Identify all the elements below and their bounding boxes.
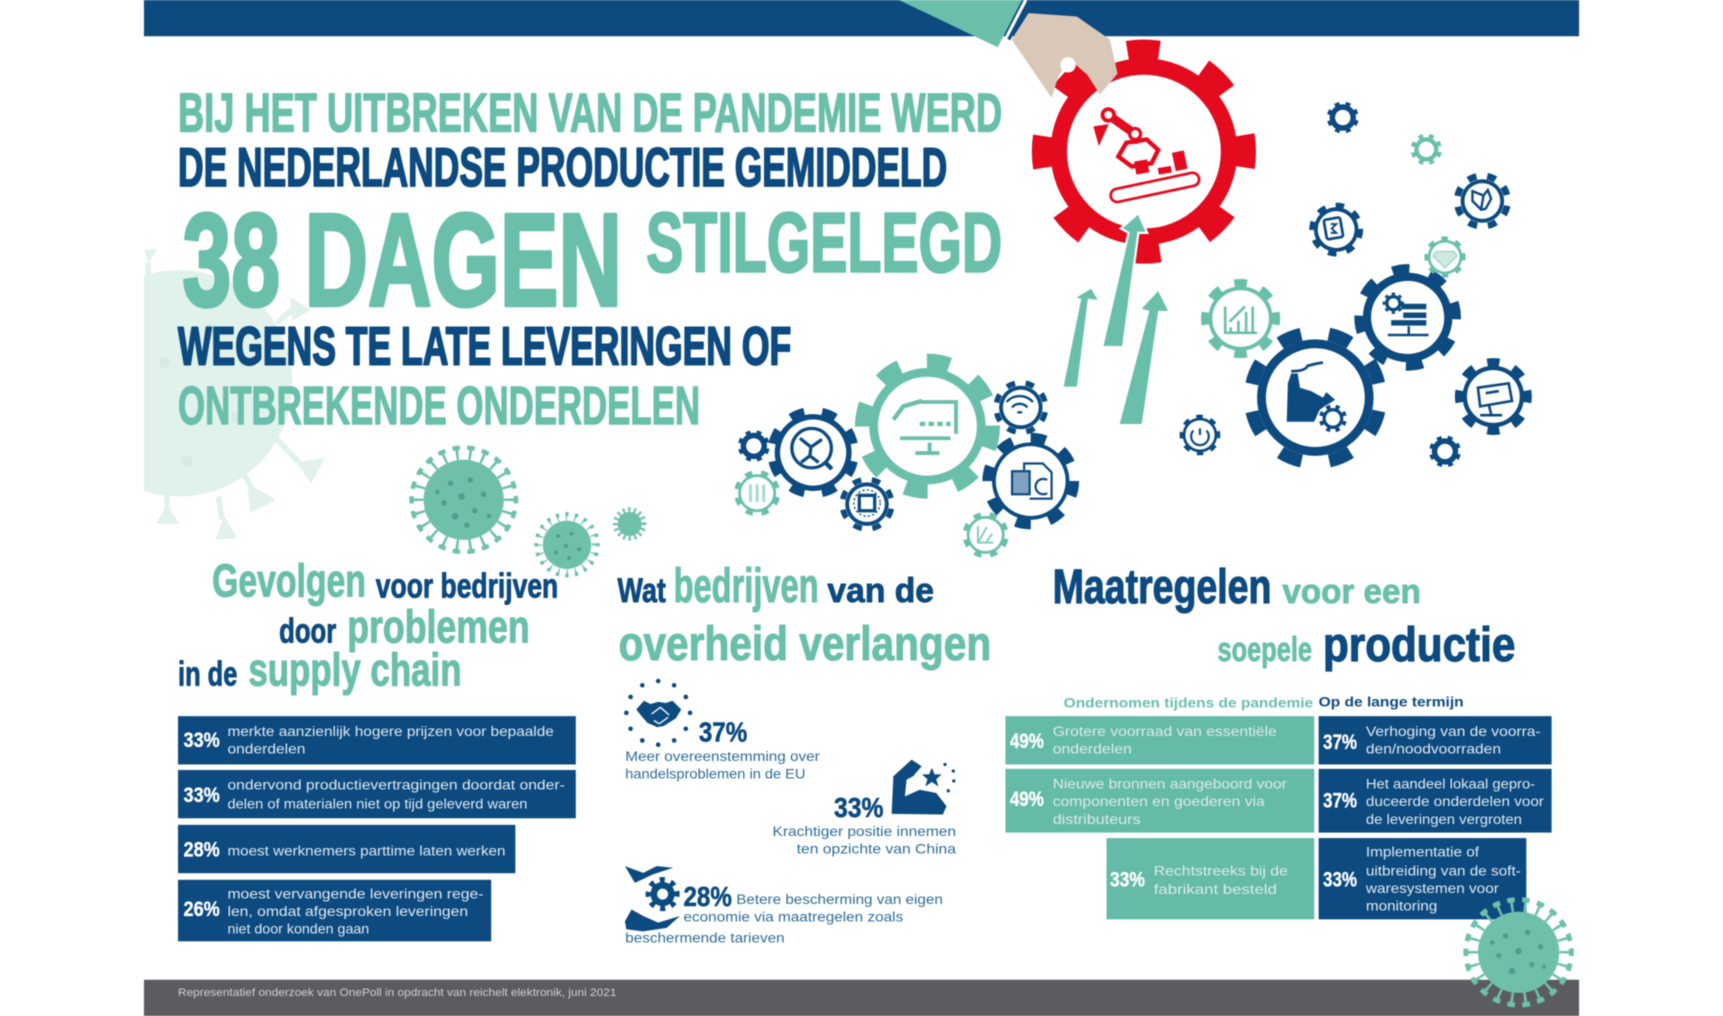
bar: 26% vervangende leveringen: 26% bbox=[184, 898, 220, 921]
heading: gevolgen: voor bedrijven bbox=[376, 568, 558, 606]
box: 49% voorraad bbox=[1005, 716, 1314, 764]
stat: 37%: Meer overeenstemming over bbox=[625, 749, 820, 765]
icon: chart bbox=[1225, 306, 1257, 333]
box: 33% rechtstreeks: 33% bbox=[1110, 868, 1145, 891]
heading: overheid: van de bbox=[827, 572, 934, 610]
virus: medium bbox=[536, 514, 598, 576]
bar: 33% hogere prijzen: 33% bbox=[184, 729, 220, 752]
box: 33% software: 33% bbox=[1323, 868, 1357, 891]
stat: 28%: Betere bescherming van eigen bbox=[736, 892, 943, 908]
column label: lange termijn: Op de lange termijn bbox=[1319, 694, 1464, 709]
box: 49% nieuwe bronnen bbox=[1005, 769, 1314, 833]
icon: handshake with stars bbox=[626, 681, 690, 745]
box: 33% rechtstreeks: fabrikant besteld bbox=[1154, 882, 1277, 898]
heading: overheid: Wat bbox=[618, 572, 666, 610]
main headline bbox=[178, 81, 1002, 436]
box: 49% nieuwe bronnen: componenten en goederen via bbox=[1053, 794, 1265, 810]
icon: bars bbox=[751, 484, 764, 502]
icon: conveyor belt bbox=[1109, 172, 1200, 203]
box: 49% nieuwe bronnen: 49% bbox=[1010, 788, 1044, 811]
icon: chip bbox=[854, 490, 880, 516]
main headline: STILGELEGD bbox=[646, 194, 1002, 289]
bar: 26% vervangende leveringen: moest vervangende leveringen rege- bbox=[227, 886, 484, 902]
stat: 28% bbox=[625, 881, 943, 946]
box: 49% voorraad: Grotere voorraad van essentiële bbox=[1053, 724, 1277, 740]
box: 49% voorraad: onderdelen bbox=[1053, 741, 1132, 757]
stat: 33%: ten opzichte van China bbox=[797, 841, 956, 857]
heading: maatregelen: voor een bbox=[1282, 573, 1421, 611]
box: 33% rechtstreeks: Rechtstreeks bij de bbox=[1154, 863, 1288, 879]
bar: 28% parttime bbox=[178, 825, 515, 873]
stat: 28%: beschermende tarieven bbox=[625, 930, 785, 946]
main headline: ONTBREKENDE ONDERDELEN bbox=[178, 376, 700, 436]
bar: 33% productievertragingen: ondervond productievertragingen doordat onder- bbox=[227, 778, 565, 794]
box: 33% software: waresystemen voor bbox=[1365, 881, 1499, 897]
red gear with production robot bbox=[1042, 49, 1246, 254]
box: 33% rechtstreeks bbox=[1107, 838, 1314, 919]
column label: tijdens pandemie: Ondernomen tijdens de pandemie bbox=[1064, 695, 1314, 710]
heading: gevolgen: problemen bbox=[347, 601, 530, 653]
bar: 33% productievertragingen bbox=[178, 770, 576, 818]
main headline: WEGENS TE LATE LEVERINGEN OF bbox=[178, 317, 791, 377]
background virus bbox=[144, 249, 325, 540]
heading: maatregelen: soepele bbox=[1218, 631, 1312, 669]
panel: maatregelen bbox=[1005, 560, 1552, 919]
bar: 33% hogere prijzen: merkte aanzienlijk hogere prijzen voor bepaalde bbox=[227, 724, 554, 740]
virus: bottom right bbox=[1466, 900, 1571, 1005]
stat: 37% bbox=[625, 716, 820, 783]
box: 37% lokaal geproduceerd bbox=[1319, 769, 1552, 833]
icon: files bbox=[1012, 464, 1052, 499]
main headline: DE NEDERLANDSE PRODUCTIE GEMIDDELD bbox=[178, 136, 947, 198]
stat: 33% bbox=[772, 792, 956, 857]
box: 49% voorraad: 49% bbox=[1010, 730, 1044, 753]
box: 37% lokaal geproduceerd: 37% bbox=[1323, 789, 1357, 812]
icon: robot arm bbox=[1093, 107, 1188, 175]
icon: server bbox=[1384, 294, 1429, 335]
icon: magnifier bbox=[792, 428, 832, 469]
main headline: 38 DAGEN bbox=[182, 186, 622, 333]
heading: gevolgen: supply chain bbox=[248, 643, 462, 695]
icon: document bbox=[1324, 217, 1343, 240]
heading: overheid: overheid verlangen bbox=[619, 617, 991, 671]
box: 33% software bbox=[1319, 838, 1526, 919]
icon: flexed arm with star bbox=[892, 760, 955, 815]
heading: overheid bbox=[618, 559, 991, 671]
footer bar: Representatief onderzoek van OnePoll in opdracht van reichelt elektronik, juni 2021 bbox=[178, 987, 616, 999]
icon: power bbox=[1191, 428, 1209, 445]
stat: 28%: economie via maatregelen zoals bbox=[683, 910, 903, 926]
heading: gevolgen: in de bbox=[178, 655, 237, 693]
stat: 28%: 28% bbox=[683, 881, 732, 912]
virus: small bbox=[615, 510, 644, 538]
box: 37% voorraden: den/noodvoorraden bbox=[1366, 741, 1501, 757]
stat: 37%: 37% bbox=[699, 716, 747, 747]
bar: 26% vervangende leveringen: len, omdat afgesproken leveringen bbox=[227, 904, 468, 920]
icon: hands protecting gear bbox=[625, 866, 680, 931]
box: 33% software: monitoring bbox=[1366, 899, 1437, 915]
icon: robot monitor bbox=[893, 401, 956, 453]
virus: large bbox=[412, 448, 516, 552]
box: 37% lokaal geproduceerd: duceerde onderdelen voor bbox=[1366, 794, 1544, 810]
left gear cluster bbox=[730, 351, 1081, 562]
stat: 37%: handelsproblemen in de EU bbox=[625, 767, 805, 783]
footer bar bbox=[144, 980, 1579, 1016]
box: 33% software: uitbreiding van de soft- bbox=[1366, 863, 1521, 879]
box: 33% software: Implementatie of bbox=[1366, 845, 1479, 861]
icon: diamond bbox=[1433, 252, 1457, 268]
upward arrows bbox=[1064, 213, 1168, 424]
stat: 33%: Krachtiger positie innemen bbox=[772, 824, 956, 840]
icon: wifi bbox=[1007, 396, 1033, 413]
box: 37% voorraden: 37% bbox=[1323, 731, 1357, 754]
heading: maatregelen bbox=[1053, 560, 1515, 672]
right gear cluster bbox=[1182, 100, 1527, 482]
box: 37% lokaal geproduceerd: de leveringen vergroten bbox=[1366, 812, 1522, 828]
box: 37% voorraden: Verhoging van de voorra- bbox=[1366, 724, 1541, 740]
panel: gevolgen bbox=[178, 554, 576, 941]
main headline: BIJ HET UITBREKEN VAN DE PANDEMIE WERD bbox=[178, 81, 1002, 143]
heading: overheid: bedrijven bbox=[674, 559, 819, 613]
box: 49% nieuwe bronnen: Nieuwe bronnen aangeboord voor bbox=[1053, 777, 1287, 793]
bar: 33% productievertragingen: 33% bbox=[184, 784, 220, 807]
box: 37% voorraden bbox=[1319, 716, 1552, 764]
bar: 33% productievertragingen: delen of materialen niet op tijd geleverd waren bbox=[227, 796, 527, 812]
bar: 33% hogere prijzen bbox=[178, 716, 576, 764]
heading: maatregelen: productie bbox=[1323, 618, 1515, 672]
bar: 28% parttime: moest werknemers parttime laten werken bbox=[227, 844, 505, 860]
icon: factory bbox=[1287, 362, 1352, 438]
box: 37% lokaal geproduceerd: Het aandeel lokaal gepro- bbox=[1366, 777, 1535, 793]
heading: maatregelen: Maatregelen bbox=[1053, 560, 1271, 614]
top banner bbox=[144, 0, 1579, 36]
icon: check bbox=[978, 526, 993, 543]
hand and sleeve bbox=[899, 0, 1118, 98]
icon: tablet bbox=[1472, 190, 1491, 210]
icon: monitor bbox=[1478, 383, 1512, 415]
stat: 33%: 33% bbox=[834, 792, 883, 823]
bar: 28% parttime: 28% bbox=[184, 839, 220, 862]
box: 49% nieuwe bronnen: distributeurs bbox=[1053, 812, 1141, 828]
heading: gevolgen: Gevolgen bbox=[212, 554, 366, 606]
bar: 26% vervangende leveringen bbox=[178, 880, 491, 941]
heading: gevolgen: door bbox=[279, 613, 336, 651]
panel: overheid bbox=[618, 559, 991, 946]
heading: gevolgen bbox=[178, 554, 558, 695]
bar: 33% hogere prijzen: onderdelen bbox=[227, 741, 305, 757]
bar: 26% vervangende leveringen: niet door konden gaan bbox=[227, 922, 369, 938]
